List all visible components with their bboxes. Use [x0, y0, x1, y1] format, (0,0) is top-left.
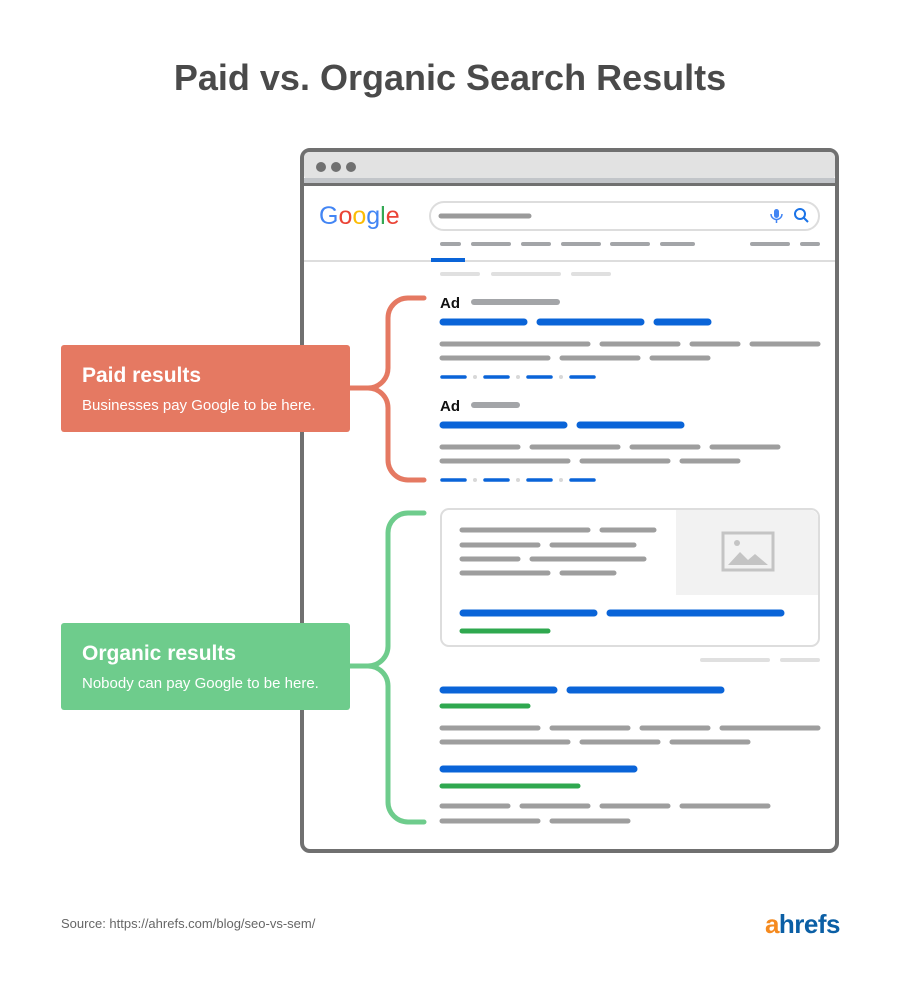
browser window	[302, 150, 837, 851]
search box	[430, 202, 819, 230]
title: Paid vs. Organic Search Results	[174, 57, 726, 98]
paid results listings: Ad	[440, 295, 460, 312]
paid results listings	[440, 295, 818, 482]
google logo: Google	[319, 202, 400, 230]
callout: organic results: Organic results	[82, 642, 236, 665]
paid results listings: Ad	[440, 398, 460, 415]
source footer: Source: https://ahrefs.com/blog/seo-vs-sem/	[61, 916, 316, 931]
organic listings	[442, 690, 818, 821]
callout: organic results	[61, 623, 350, 710]
bracket: paid	[350, 298, 424, 480]
callout: paid results: Paid results	[82, 364, 201, 387]
callout: paid results: Businesses pay Google to be here.	[82, 397, 315, 414]
featured card	[441, 509, 819, 646]
bracket: organic	[350, 513, 424, 822]
ahrefs logo: ahrefs	[765, 909, 840, 939]
callout: paid results	[61, 345, 350, 432]
icon: image placeholder	[723, 533, 773, 570]
callout: organic results: Nobody can pay Google to be here.	[82, 675, 319, 692]
